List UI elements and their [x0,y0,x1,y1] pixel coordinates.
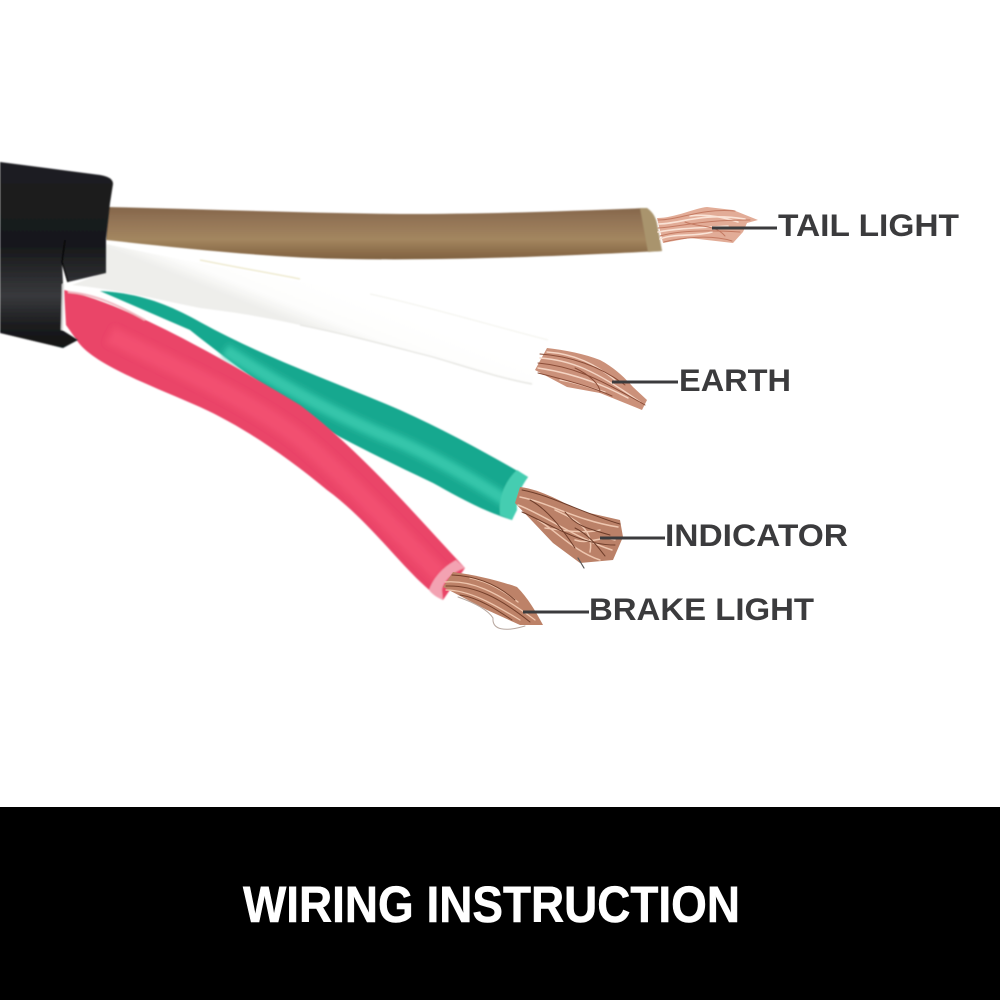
black outer sheath [0,162,113,348]
leader line: earth [612,380,678,384]
teal wire: indicator [100,291,528,520]
copper strands: tail light [657,207,758,243]
leader line: tail light [712,226,777,230]
red wire: brake light [64,290,465,600]
label: earth: EARTH [679,362,791,398]
footer band [0,807,1000,1000]
label: indicator: INDICATOR [665,517,848,553]
copper strands: brake light [443,572,543,629]
copper strands: indicator [515,487,623,568]
leader line: indicator [600,536,665,540]
leader line: brake light [523,610,589,614]
label: tail light: TAIL LIGHT [778,207,959,243]
footer title: WIRING INSTRUCTION [243,876,740,933]
white wire: earth [72,244,550,385]
brown wire: tail light [106,207,662,259]
label: brake light: BRAKE LIGHT [589,591,814,627]
copper strands: earth [535,348,647,410]
